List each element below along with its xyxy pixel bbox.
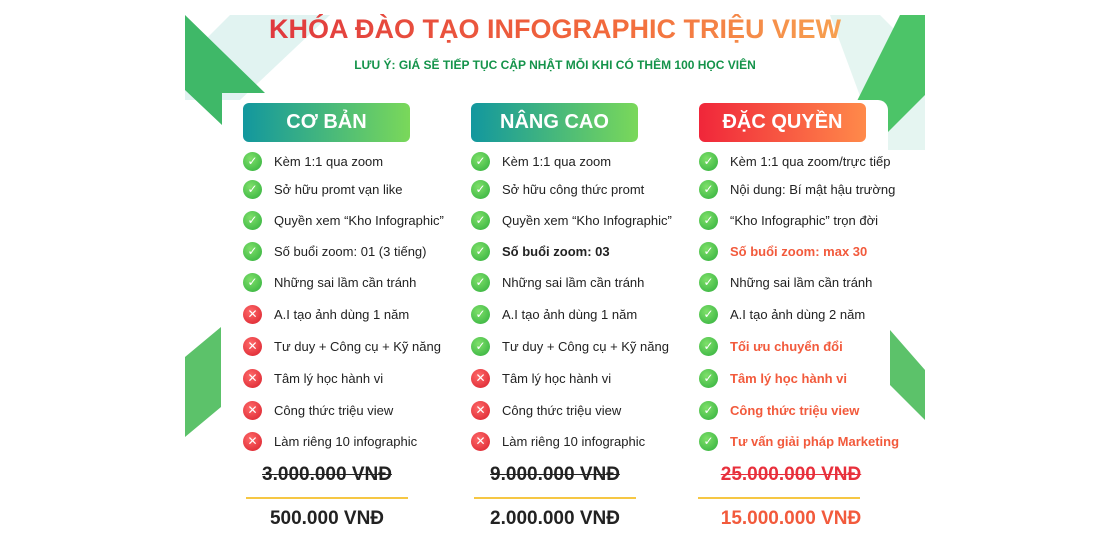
column 1 list: Số buổi zoom: 01 (3 tiếng) <box>274 244 426 259</box>
column 3 list: ✓ <box>703 339 714 353</box>
column 2 list: Những sai lầm cần tránh <box>502 275 644 290</box>
header: dac quyen: ĐẶC QUYỀN <box>722 111 842 133</box>
column 3 list: ✓ <box>703 307 714 321</box>
column 2 list: ✓ <box>475 339 486 353</box>
column 2 list: Làm riêng 10 infographic <box>502 434 645 449</box>
column 1 list: Quyền xem “Kho Infographic” <box>274 213 444 228</box>
column 1 list: Sở hữu promt vạn like <box>274 182 403 197</box>
column 3 list: Số buổi zoom: max 30 <box>730 244 867 259</box>
column 1 list: ✓ <box>247 213 258 227</box>
column 3 list <box>699 152 899 451</box>
column 3 list: ✓ <box>703 182 714 196</box>
column 1 list: Công thức triệu view <box>274 403 393 418</box>
price col2: 9.000.000 VNĐ <box>490 464 620 485</box>
price col3 <box>698 464 862 529</box>
column 1 list: ✕ <box>247 371 258 385</box>
column 2 list: A.I tạo ảnh dùng 1 năm <box>502 307 637 322</box>
column 2 list: Tâm lý học hành vi <box>502 371 611 386</box>
column 1 list: ✕ <box>247 403 258 417</box>
column 3 list: Công thức triệu view <box>730 403 859 418</box>
column 2 list: ✓ <box>475 182 486 196</box>
column 1 list: Những sai lầm cần tránh <box>274 275 416 290</box>
title: KHÓA ĐÀO TẠO INFOGRAPHIC TRIỆU VIEW <box>269 14 841 44</box>
price col1: 3.000.000 VNĐ <box>262 464 392 485</box>
column 1 list: Kèm 1:1 qua zoom <box>274 154 383 169</box>
header: co ban <box>243 103 410 142</box>
column 3 list: ✓ <box>703 371 714 385</box>
column 3 list: ✓ <box>703 403 714 417</box>
price col3: 15.000.000 VNĐ <box>721 508 861 529</box>
column 1 list: ✕ <box>247 339 258 353</box>
column 1 list: ✓ <box>247 154 258 168</box>
header: nang cao <box>471 103 638 142</box>
column 2 list: ✓ <box>475 307 486 321</box>
column 1 list: ✕ <box>247 434 258 448</box>
column 3 list: ✓ <box>703 275 714 289</box>
column 3 list: ✓ <box>703 154 714 168</box>
price col2: 2.000.000 VNĐ <box>490 508 620 529</box>
column 3 list: ✓ <box>703 434 714 448</box>
column 2 list: Sở hữu công thức promt <box>502 182 644 197</box>
column 2 list: ✕ <box>475 434 486 448</box>
column 1 list: ✓ <box>247 182 258 196</box>
column 3 list: Tư vấn giải pháp Marketing <box>730 434 899 449</box>
column 3 list: “Kho Infographic” trọn đời <box>730 213 878 228</box>
column 1 list: Làm riêng 10 infographic <box>274 434 417 449</box>
column 1 list: ✓ <box>247 275 258 289</box>
column 3 list: Tối ưu chuyển đổi <box>730 339 843 354</box>
price col1 <box>246 464 408 529</box>
price col1: 500.000 VNĐ <box>270 508 384 529</box>
column 2 list: Kèm 1:1 qua zoom <box>502 154 611 169</box>
header: co ban: CƠ BẢN <box>286 111 367 133</box>
subtitle: LƯU Ý: GIÁ SẼ TIẾP TỤC CẬP NHẬT MỖI KHI CÓ THÊM 100 HỌC VIÊN <box>354 58 756 72</box>
column 3 list: Tâm lý học hành vi <box>730 371 847 386</box>
column 2 list: ✓ <box>475 154 486 168</box>
column 3 list: ✓ <box>703 213 714 227</box>
column 3 list: Những sai lầm cần tránh <box>730 275 872 290</box>
header: dac quyen <box>699 103 866 142</box>
price col2 <box>474 464 636 529</box>
column 3 list: Nội dung: Bí mật hậu trường <box>730 182 895 197</box>
column 2 list: ✓ <box>475 213 486 227</box>
column 3 list: A.I tạo ảnh dùng 2 năm <box>730 307 865 322</box>
column 3 list: ✓ <box>703 244 714 258</box>
column 2 list: Quyền xem “Kho Infographic” <box>502 213 672 228</box>
column 1 list <box>243 152 444 451</box>
column 2 list <box>471 152 672 451</box>
price col3: 25.000.000 VNĐ <box>721 464 861 485</box>
column 2 list: ✕ <box>475 371 486 385</box>
column 3 list: Kèm 1:1 qua zoom/trực tiếp <box>730 154 890 169</box>
column 1 list: ✕ <box>247 307 258 321</box>
column 2 list: ✓ <box>475 275 486 289</box>
column 1 list: Tâm lý học hành vi <box>274 371 383 386</box>
column 2 list: ✕ <box>475 403 486 417</box>
column 2 list: Số buổi zoom: 03 <box>502 244 610 259</box>
column 2 list: Tư duy + Công cụ + Kỹ năng <box>502 339 669 354</box>
column 1 list: Tư duy + Công cụ + Kỹ năng <box>274 339 441 354</box>
column 2 list: ✓ <box>475 244 486 258</box>
header: nang cao: NÂNG CAO <box>500 111 609 133</box>
column 1 list: ✓ <box>247 244 258 258</box>
column 2 list: Công thức triệu view <box>502 403 621 418</box>
column 1 list: A.I tạo ảnh dùng 1 năm <box>274 307 409 322</box>
